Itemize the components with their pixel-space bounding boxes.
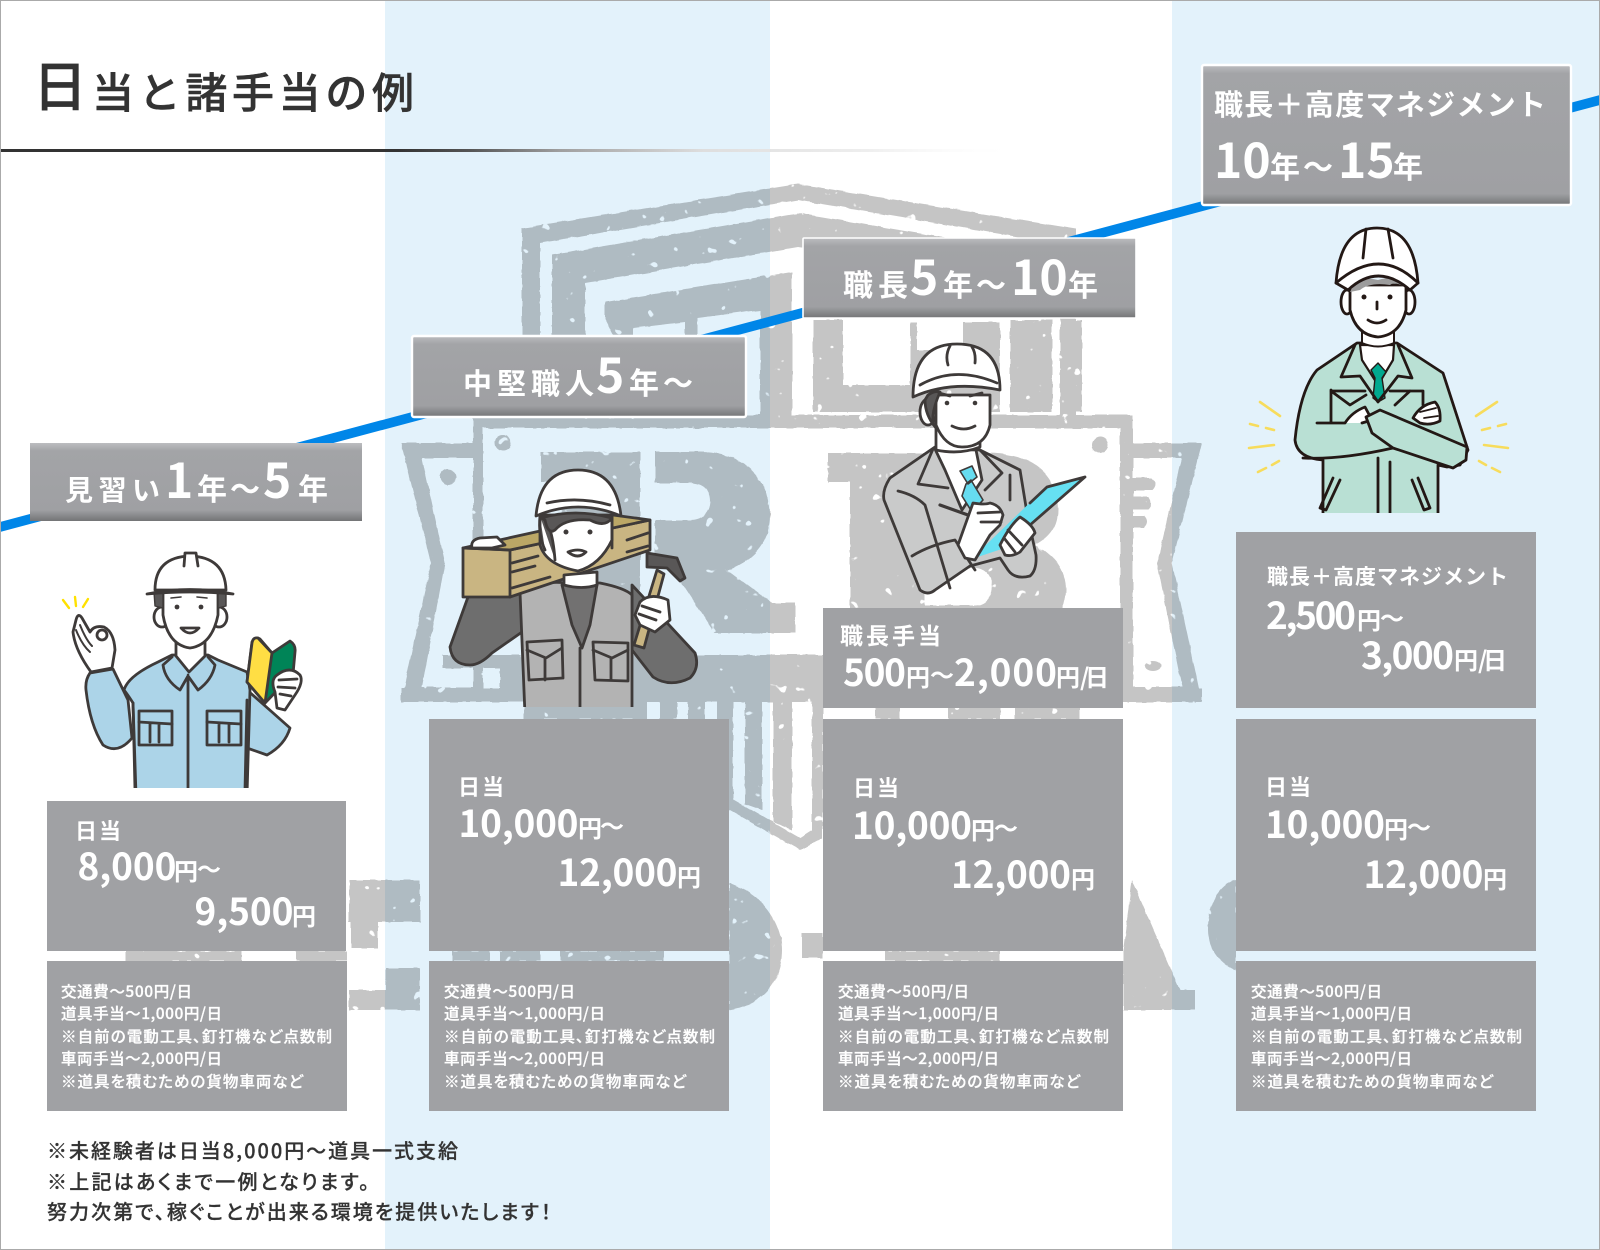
heading: apprentice: 年	[298, 465, 328, 509]
card: daily wage	[823, 719, 1123, 951]
rising timeline arrow line	[0, 95, 1600, 532]
heading: foreman: 年	[1068, 261, 1098, 305]
card: daily wage: ～	[1407, 808, 1431, 843]
card: allowances: ※自前の電動工具、釘打機など点数制	[1251, 1025, 1522, 1047]
card: management allowance: ～	[1380, 599, 1404, 634]
card: allowances: 交通費～500円/日	[1251, 980, 1382, 1002]
card: management allowance: 円	[1357, 601, 1381, 636]
card: allowances: ※道具を積むための貨物車両など	[838, 1070, 1081, 1092]
heading: foreman: 職長	[843, 261, 908, 305]
heading: foreman: 5	[910, 239, 938, 309]
card: daily wage	[429, 719, 729, 951]
title: 日	[33, 43, 87, 122]
card: daily wage: 日当	[853, 771, 899, 803]
heading: foreman: 年	[943, 261, 973, 305]
card: daily wage: ～	[197, 850, 221, 885]
card: daily wage: 10,000	[1265, 795, 1385, 849]
card: management allowance: /日	[1478, 641, 1507, 676]
footnotes: ※未経験者は日当8,000円〜道具一式支給	[47, 1135, 458, 1164]
panel: mid-level column	[412, 336, 746, 1111]
card: foreman allowance: 職長手当	[840, 617, 941, 651]
card: allowances: ※自前の電動工具、釘打機など点数制	[61, 1025, 332, 1047]
card: allowances: 車両手当～2,000円/日	[838, 1047, 999, 1069]
card: daily wage	[47, 801, 346, 951]
heading: mid-level: 5	[596, 337, 624, 407]
panel: apprentice column	[30, 442, 362, 1111]
card: allowances: ※自前の電動工具、釘打機など点数制	[444, 1025, 715, 1047]
card: management allowance: 職長＋高度マネジメント	[1267, 561, 1508, 591]
heading: senior manager: 15	[1338, 122, 1395, 192]
card: foreman allowance: 円	[906, 658, 930, 693]
heading: senior manager: 職長＋高度マネジメント	[1214, 82, 1546, 124]
heading: senior manager: 年	[1270, 143, 1300, 187]
heading: apprentice: ～	[230, 465, 260, 509]
card: daily wage: 円	[578, 809, 602, 844]
footnotes: ※上記はあくまで一例となります。	[47, 1166, 369, 1195]
card: daily wage: 10,000	[852, 796, 972, 850]
card: allowances	[1236, 961, 1536, 1111]
heading: mid-level: 中堅職人	[463, 361, 594, 403]
card: allowances	[47, 961, 347, 1111]
card: allowances: 道具手当～1,000円/日	[838, 1002, 999, 1024]
card: allowances: ※道具を積むための貨物車両など	[61, 1070, 304, 1092]
footnotes: 努力次第で、稼ぐことが出来る環境を提供いたします！	[47, 1196, 551, 1225]
card: daily wage: 円	[1071, 860, 1095, 895]
heading: senior manager: 10	[1214, 122, 1271, 192]
icon: manager with crossed arms	[1249, 228, 1508, 520]
card: foreman allowance: 2,000	[954, 643, 1057, 697]
card: allowances: 道具手当～1,000円/日	[444, 1002, 605, 1024]
heading: foreman: ～	[976, 261, 1006, 305]
card: daily wage: ～	[994, 809, 1018, 844]
panel: foreman column	[803, 238, 1136, 1111]
card: daily wage: 日当	[75, 814, 121, 846]
card: allowances: 道具手当～1,000円/日	[61, 1002, 222, 1024]
title rule	[1, 149, 1020, 152]
icon: apprentice worker	[63, 553, 301, 795]
heading: apprentice: 5	[263, 442, 291, 512]
footnotes	[47, 1135, 551, 1225]
panel: senior manager column	[1202, 65, 1571, 1111]
card: allowances: 車両手当～2,000円/日	[61, 1047, 222, 1069]
heading: foreman	[803, 238, 1136, 318]
card: management allowance: 2,500	[1266, 586, 1356, 640]
heading: apprentice: 1	[165, 442, 193, 512]
card: allowances	[823, 961, 1123, 1111]
card: allowances: 交通費～500円/日	[444, 980, 575, 1002]
icon: foreman with clipboard	[884, 344, 1085, 593]
card: allowances: 交通費～500円/日	[61, 980, 192, 1002]
card: foreman allowance: 500	[843, 643, 906, 697]
card: allowances: ※自前の電動工具、釘打機など点数制	[838, 1025, 1109, 1047]
card: management allowance: 円	[1454, 641, 1478, 676]
card: daily wage: 円	[1483, 860, 1507, 895]
card: allowances: ※道具を積むための貨物車両など	[1251, 1070, 1494, 1092]
heading: apprentice: 年	[197, 465, 227, 509]
title	[33, 43, 414, 122]
title: 当と諸手当の例	[92, 60, 414, 121]
card: daily wage	[1236, 719, 1536, 951]
card: allowances: 道具手当～1,000円/日	[1251, 1002, 1412, 1024]
card: daily wage: 9,500	[194, 882, 294, 936]
card: daily wage: 円	[1384, 810, 1408, 845]
heading: apprentice: 見習い	[65, 469, 160, 509]
watermark logo	[126, 184, 1236, 1010]
card: allowances: 車両手当～2,000円/日	[444, 1047, 605, 1069]
icon: worker with lumber	[450, 470, 697, 715]
card: daily wage: 円	[677, 858, 701, 893]
card: allowances: ※道具を積むための貨物車両など	[444, 1070, 687, 1092]
card: management allowance: 3,000	[1361, 626, 1454, 680]
heading: mid-level: ～	[663, 359, 693, 403]
card: allowances	[429, 961, 729, 1111]
card: daily wage: ～	[600, 807, 624, 842]
card: allowances: 交通費～500円/日	[838, 980, 969, 1002]
card: daily wage: 12,000	[951, 845, 1071, 899]
heading: mid-level: 年	[629, 359, 659, 403]
card: daily wage: 8,000	[78, 837, 176, 891]
heading: foreman: 10	[1011, 239, 1068, 309]
card: daily wage: 12,000	[1364, 845, 1484, 899]
card: daily wage: 12,000	[558, 843, 678, 897]
card: daily wage: 円	[971, 811, 995, 846]
heading: senior manager: ～	[1303, 143, 1333, 187]
card: allowances: 車両手当～2,000円/日	[1251, 1047, 1412, 1069]
heading: apprentice	[30, 442, 362, 521]
card: foreman allowance: ～	[930, 656, 954, 691]
card: daily wage: 円	[174, 852, 198, 887]
heading: mid-level	[412, 336, 746, 417]
card: daily wage: 円	[292, 897, 316, 932]
card: daily wage: 日当	[1265, 770, 1311, 802]
card: foreman allowance: /日	[1080, 658, 1109, 693]
card: daily wage: 10,000	[458, 794, 578, 848]
card: management allowance	[1236, 532, 1536, 708]
card: foreman allowance: 円	[1056, 658, 1080, 693]
heading: senior manager	[1202, 65, 1571, 205]
card: daily wage: 日当	[458, 770, 504, 802]
heading: senior manager: 年	[1393, 143, 1423, 187]
card: foreman allowance	[823, 608, 1123, 708]
